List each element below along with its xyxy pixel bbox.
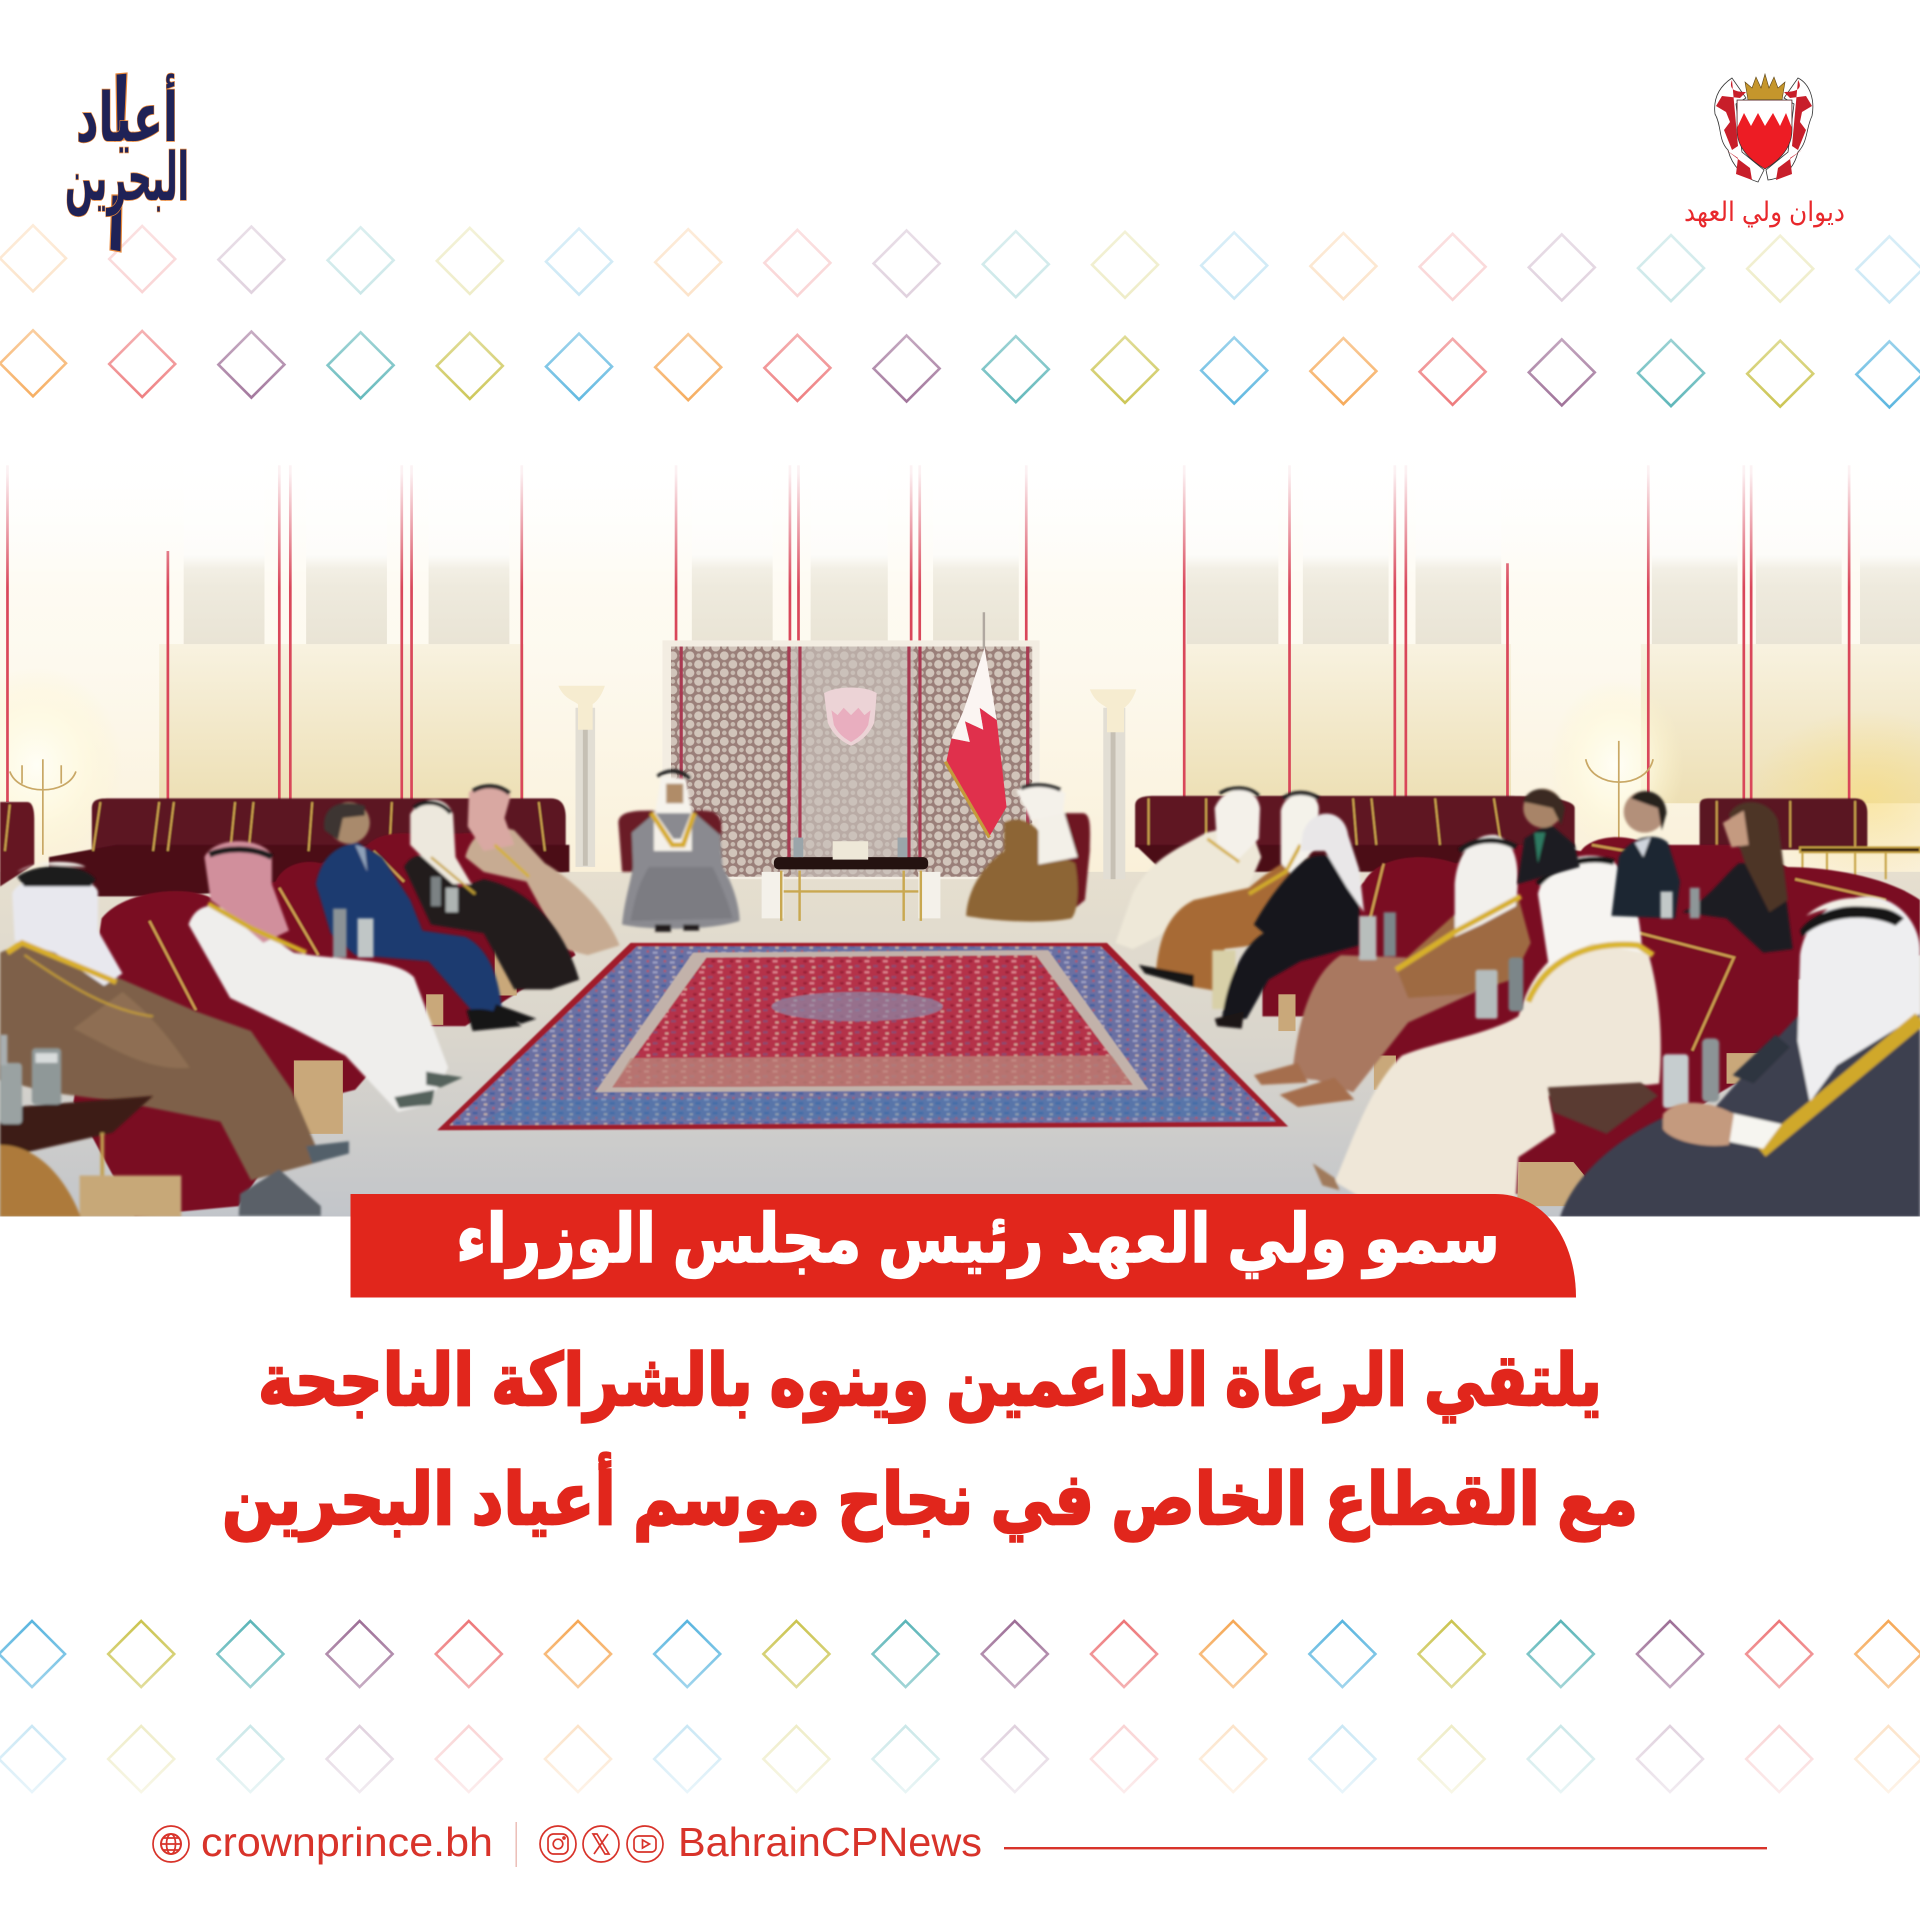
back row: woman in black (1660, 802, 1793, 953)
person: black robe, white headdress (404, 800, 579, 989)
gift boxes (294, 949, 1763, 1206)
person: center left, grey robe (618, 771, 740, 932)
headline line 1: يلتقي الرعاة الداعمين وينوه بالشراكة الناجحة (258, 1341, 1602, 1423)
right table with glass and bottle (1476, 958, 1719, 1134)
icon: youtube (627, 1826, 663, 1862)
decorative diamond rows: bottom (0, 1618, 1920, 1795)
person: right, brown robe (1139, 793, 1319, 992)
decorative diamond rows: top (0, 220, 1920, 415)
icon: shield (1737, 100, 1792, 169)
logo: Crown Prince Court emblem (1684, 74, 1845, 228)
headline line 2: مع القطاع الخاص في نجاح موسم أعياد البحرين (222, 1452, 1638, 1542)
bottom-left table, glasses and box (0, 1035, 181, 1217)
back row: man in suit, green tie (1517, 789, 1580, 884)
logo: Bahrain festivities calligraphy: البحرين (65, 141, 189, 216)
logo: Bahrain festivities calligraphy (65, 73, 189, 252)
flag of Bahrain (945, 612, 1007, 838)
banner text: سمو ولي العهد رئيس مجلس الوزراء (456, 1201, 1500, 1279)
person: navy suit (316, 802, 536, 1031)
back sofas (0, 796, 1920, 896)
person: white robe, red checked headdress (189, 841, 463, 1112)
person: brown and mauve robe (1254, 835, 1531, 1107)
right-side sofas (1262, 837, 1920, 1194)
person: woman with black abaya and white scarf (1212, 814, 1364, 1029)
icon: mantling ornaments (1715, 78, 1813, 182)
chandeliers (10, 741, 1653, 855)
icon: crown (1745, 74, 1785, 100)
website text: crownprince.bh (201, 1819, 493, 1865)
person: center right, brown robe (966, 784, 1090, 922)
person: cream robe (1313, 856, 1661, 1196)
person: far right, dark robe with gold trim (1560, 896, 1920, 1217)
wall with windows (0, 554, 1920, 872)
person: far left, brown robe (0, 862, 349, 1216)
floor lamps (558, 686, 1136, 879)
center table (762, 838, 940, 921)
icon: X (583, 1826, 619, 1862)
left-side sofas (73, 833, 576, 1216)
icon: globe (153, 1826, 189, 1862)
footer (153, 1819, 1767, 1867)
red banner (350, 1194, 1576, 1298)
red rule (1004, 1847, 1767, 1849)
back row: man in dark suit (1611, 791, 1680, 918)
logo text: ديوان ولي العهد (1684, 197, 1845, 228)
social handle text: BahrainCPNews (678, 1819, 982, 1865)
photo: meeting in the majlis hall (0, 435, 1920, 1217)
lattice screen with emblem (662, 640, 1040, 879)
icon: instagram (540, 1826, 576, 1862)
person: tan robe, pink headdress (465, 785, 620, 955)
floor (0, 872, 1920, 1217)
headline (222, 1341, 1638, 1542)
carpet (437, 943, 1288, 1130)
person: right, white robe (1116, 788, 1261, 949)
top fade (6, 465, 1850, 582)
logo: Bahrain festivities calligraphy: أعياد (76, 73, 178, 156)
divider (516, 1822, 517, 1867)
red vertical wall lines (6, 465, 1850, 802)
